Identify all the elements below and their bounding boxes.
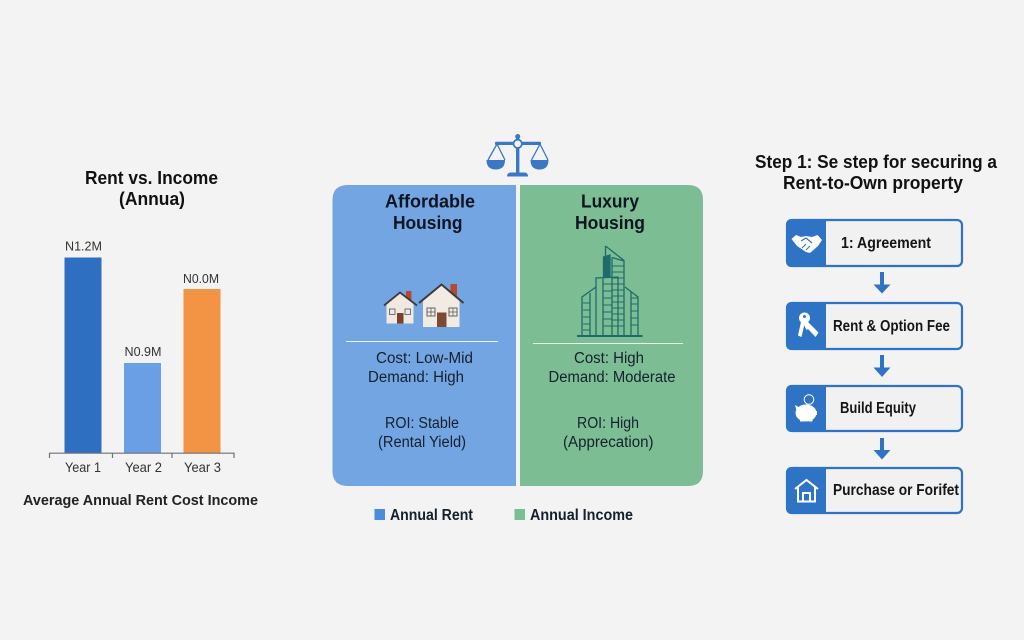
bar: year 1: N1.2M	[65, 238, 102, 254]
legend item: annual income: Annual Income	[530, 507, 633, 524]
panel background green	[520, 185, 703, 486]
bar: year 3: N0.0M	[183, 271, 219, 286]
icon: balance scale	[486, 134, 548, 176]
text: roi: ROI: Stable	[385, 415, 459, 432]
bar chart	[50, 238, 234, 475]
step: purchase or forfeit	[786, 467, 962, 514]
chart title	[85, 167, 218, 209]
icon: two houses	[384, 284, 464, 327]
axis labels: Year 3	[184, 459, 221, 475]
chart title: Rent vs. Income	[85, 167, 218, 188]
chart title: (Annua)	[119, 188, 185, 209]
step: agreement	[786, 219, 962, 267]
heading: luxury housing	[575, 190, 645, 233]
panel: rent vs income chart	[23, 167, 258, 509]
icon: keys	[798, 312, 818, 337]
divider	[533, 343, 683, 344]
step: build equity	[786, 385, 962, 432]
text: roi: (Rental Yield)	[378, 434, 466, 451]
step: agreement: 1: Agreement	[841, 235, 931, 252]
bar: year 2: N0.9M	[124, 344, 162, 359]
icon: handshake	[792, 235, 822, 253]
steps heading	[755, 151, 998, 193]
panel: rent-to-own steps	[755, 151, 998, 514]
panel: luxury housing	[520, 185, 703, 486]
arrow	[874, 272, 890, 294]
chart caption: Average Annual Rent Cost Income	[23, 492, 258, 509]
text: roi: (Apprecation)	[563, 434, 654, 451]
arrow	[874, 438, 890, 460]
panel: affordable housing	[332, 185, 516, 486]
heading: luxury housing: Luxury	[581, 190, 640, 212]
icon: piggy bank	[795, 395, 817, 422]
axis labels: Year 1	[65, 459, 101, 475]
steps heading: Rent-to-Own property	[783, 172, 964, 193]
legend item: annual rent: Annual Rent	[390, 507, 473, 524]
heading: affordable housing: Affordable	[385, 190, 475, 212]
icon: skyscraper	[577, 246, 642, 336]
heading: affordable housing: Housing	[393, 212, 462, 233]
arrow	[874, 355, 890, 377]
axis labels: Year 2	[125, 459, 162, 475]
heading: affordable housing	[385, 190, 475, 233]
bar: year 1	[64, 238, 102, 453]
icon: house	[795, 480, 818, 502]
bar: year 3	[183, 271, 220, 453]
axis labels	[65, 459, 221, 475]
text: roi: ROI: High	[577, 415, 639, 432]
panel background blue	[332, 185, 516, 486]
chart axis	[50, 453, 234, 458]
text: roi	[378, 415, 466, 451]
text: cost and demand: Demand: High	[368, 369, 464, 386]
text: cost and demand	[368, 350, 473, 386]
heading: luxury housing: Housing	[575, 212, 645, 233]
bar: year 2	[124, 344, 162, 453]
legend	[374, 507, 633, 524]
step: rent and option fee	[786, 302, 962, 350]
text: cost and demand: Demand: Moderate	[548, 369, 676, 386]
steps heading: Step 1: Se step for securing a	[755, 151, 998, 172]
text: roi	[563, 415, 654, 451]
text: cost and demand: Cost: High	[574, 350, 644, 367]
text: cost and demand: Cost: Low-Mid	[376, 350, 473, 367]
step: purchase or forfeit: Purchase or Forifet	[833, 482, 959, 499]
step: rent and option fee: Rent & Option Fee	[833, 318, 950, 335]
text: cost and demand	[548, 350, 676, 386]
divider	[346, 341, 498, 342]
step: build equity: Build Equity	[840, 400, 916, 417]
